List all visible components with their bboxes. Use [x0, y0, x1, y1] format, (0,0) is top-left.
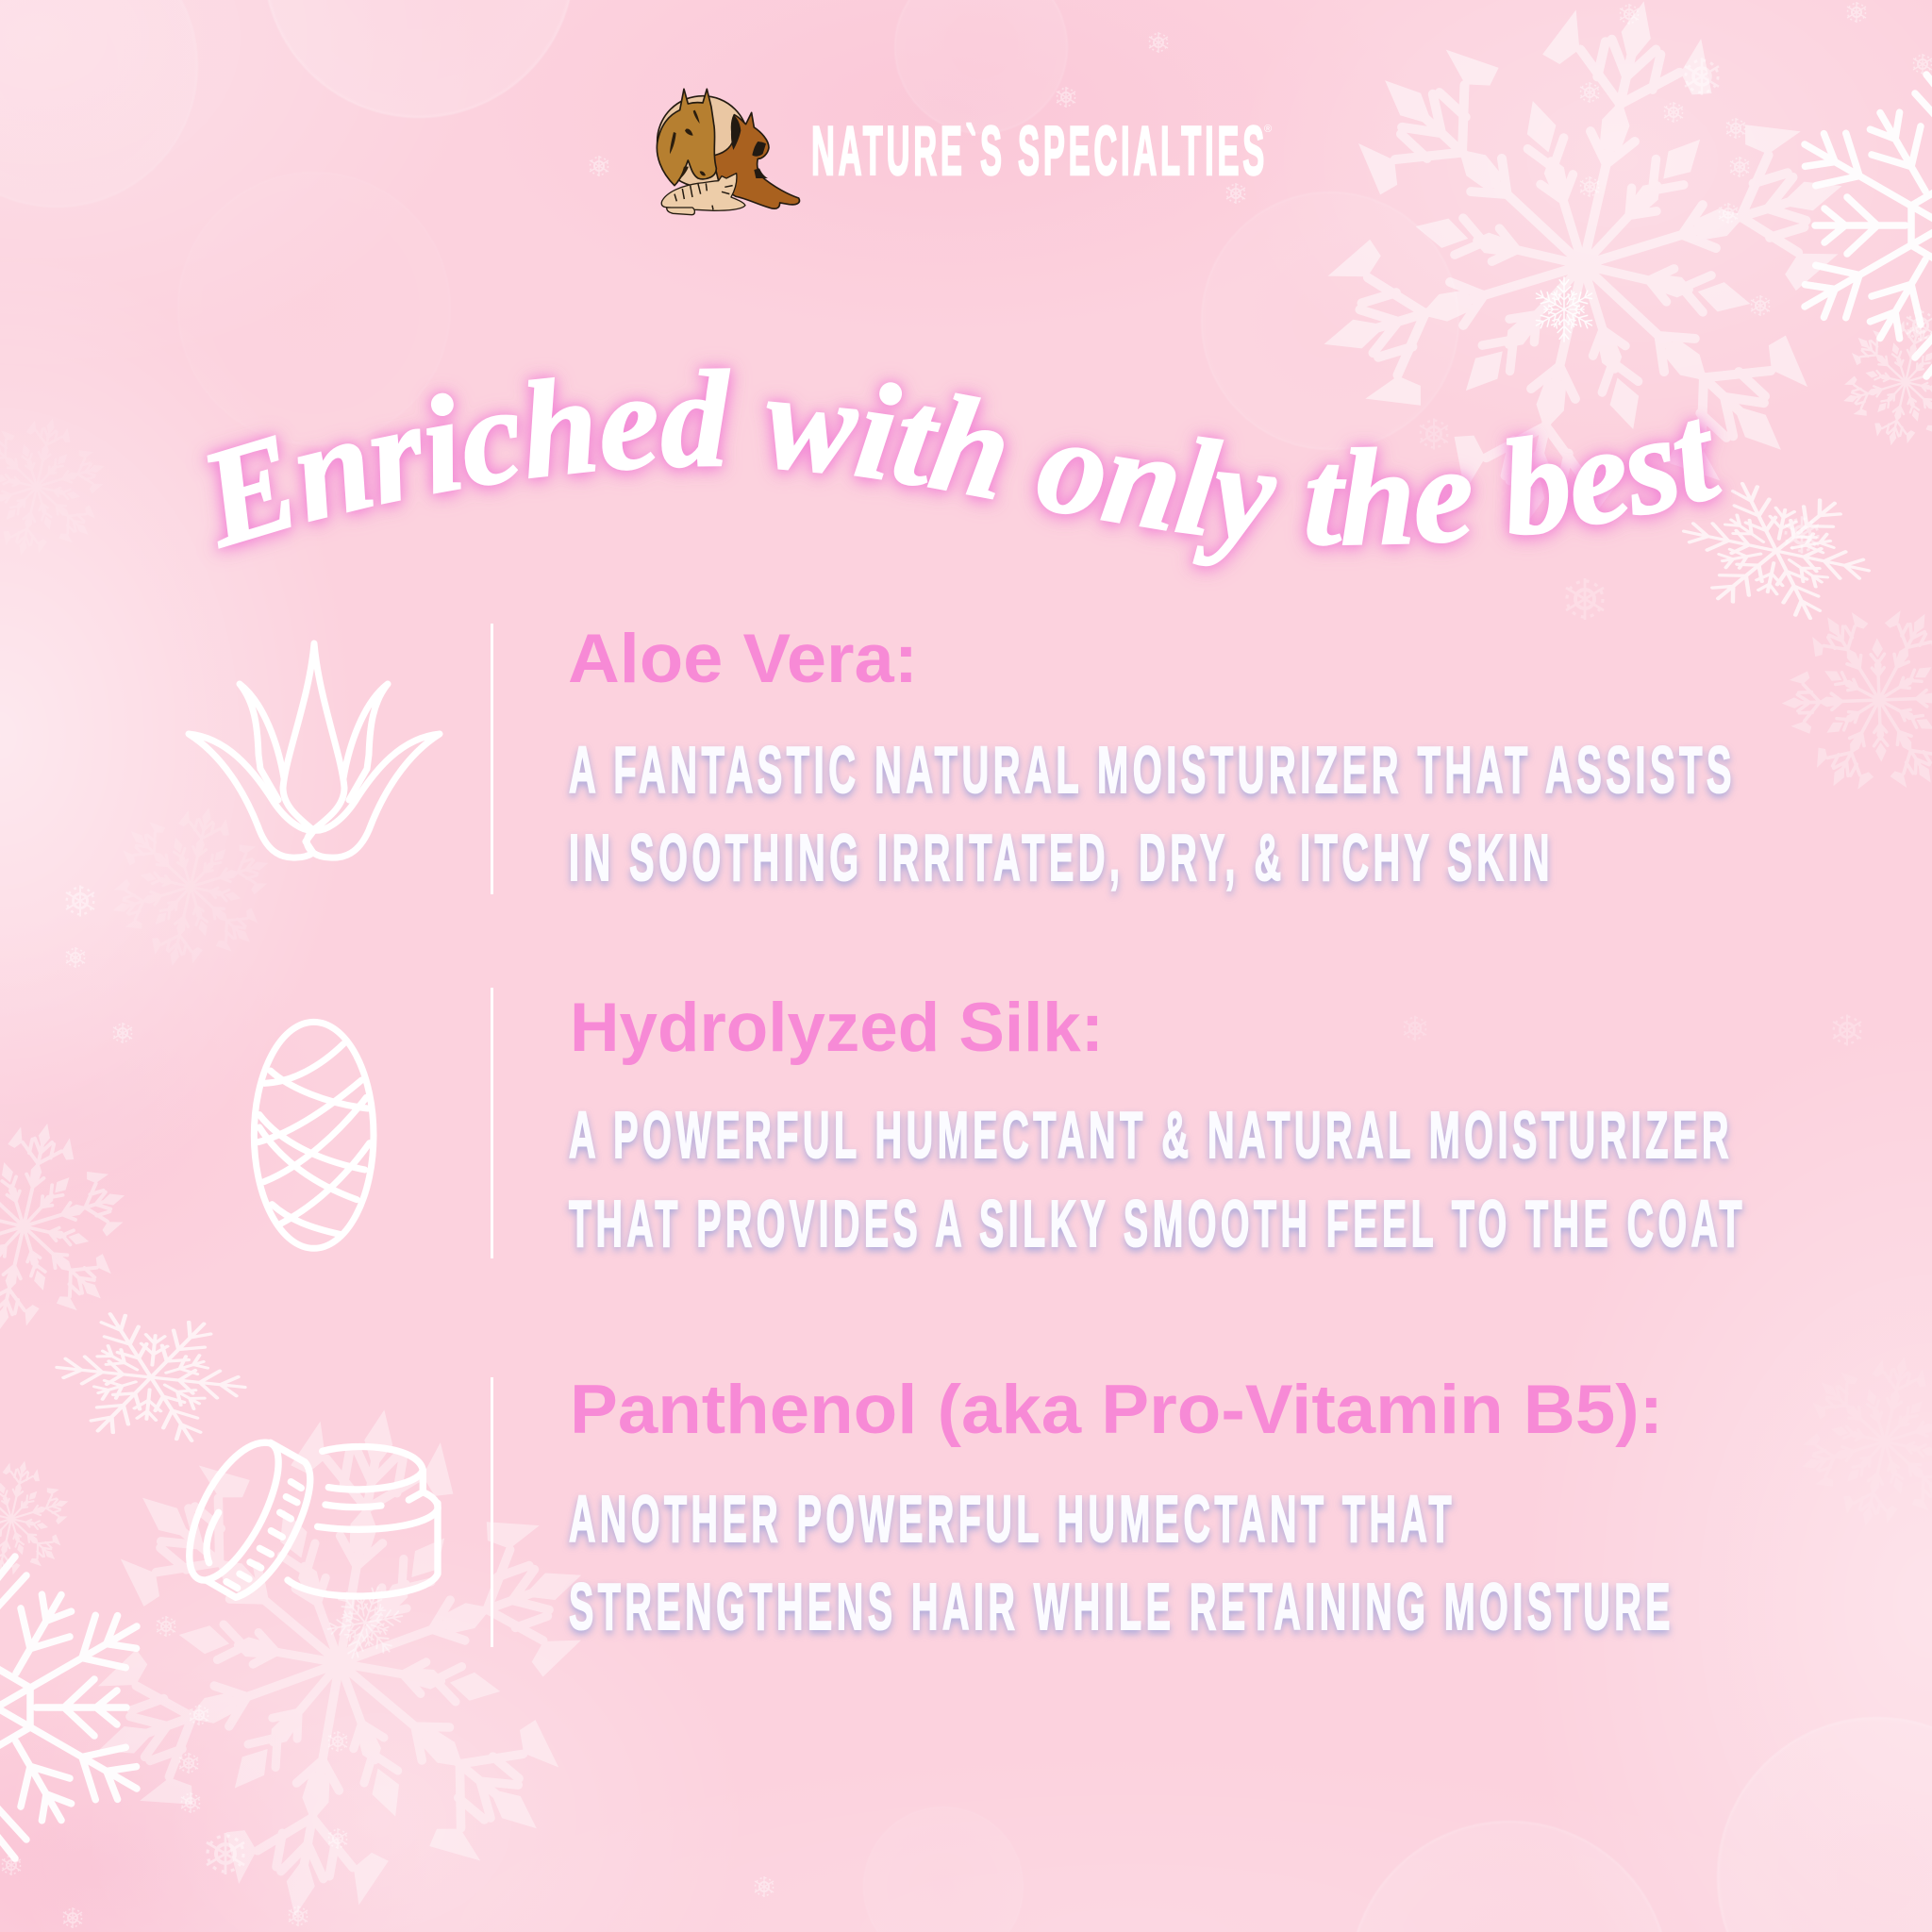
snowflake: crisp right edge	[1790, 63, 1932, 388]
panel: aloe vera	[189, 621, 1736, 894]
icon: aloe plant	[189, 643, 440, 858]
divider	[491, 988, 493, 1258]
panel: hydrolyzed silk	[254, 988, 1746, 1260]
heading: panthenol: Panthenol (aka Pro-Vitamin B5):	[570, 1372, 1663, 1448]
snowflakes: thin accent flakes	[50, 277, 1882, 1671]
heading: hydrolyzed silk: Hydrolyzed Silk:	[570, 990, 1104, 1066]
snowflakes: small petal flakes	[0, 314, 1932, 1581]
divider	[491, 624, 493, 894]
icon: open cream jar	[190, 1442, 438, 1597]
registered mark: ®	[1264, 124, 1272, 135]
logo	[657, 89, 1272, 215]
heading: aloe vera: Aloe Vera:	[568, 621, 918, 697]
icon: silk cocoon	[254, 1022, 374, 1248]
divider	[491, 1377, 493, 1647]
snowflakes: large translucent top right	[1299, 0, 1867, 548]
snowflake: crisp left edge	[0, 1545, 152, 1870]
description: panthenol	[569, 1482, 1674, 1643]
description: hydrolyzed silk	[569, 1098, 1746, 1260]
description: aloe vera	[569, 733, 1736, 894]
panel: panthenol	[190, 1372, 1674, 1647]
text: NATURE`S SPECIALTIES	[811, 113, 1268, 190]
title: Enriched with only the best	[199, 358, 1730, 579]
snowflakes: large translucent bottom left	[56, 1380, 624, 1932]
logo mark: horse, dog and cat	[657, 89, 799, 215]
